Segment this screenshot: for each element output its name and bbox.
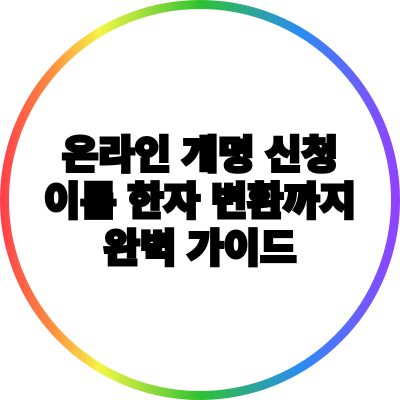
title line 1: 온라인 개명 신청 (62, 134, 338, 178)
title line 3: 완벽 가이드 (104, 228, 296, 271)
title (44, 134, 356, 271)
title line 2: 이름 한자 변환까지 (44, 181, 356, 224)
